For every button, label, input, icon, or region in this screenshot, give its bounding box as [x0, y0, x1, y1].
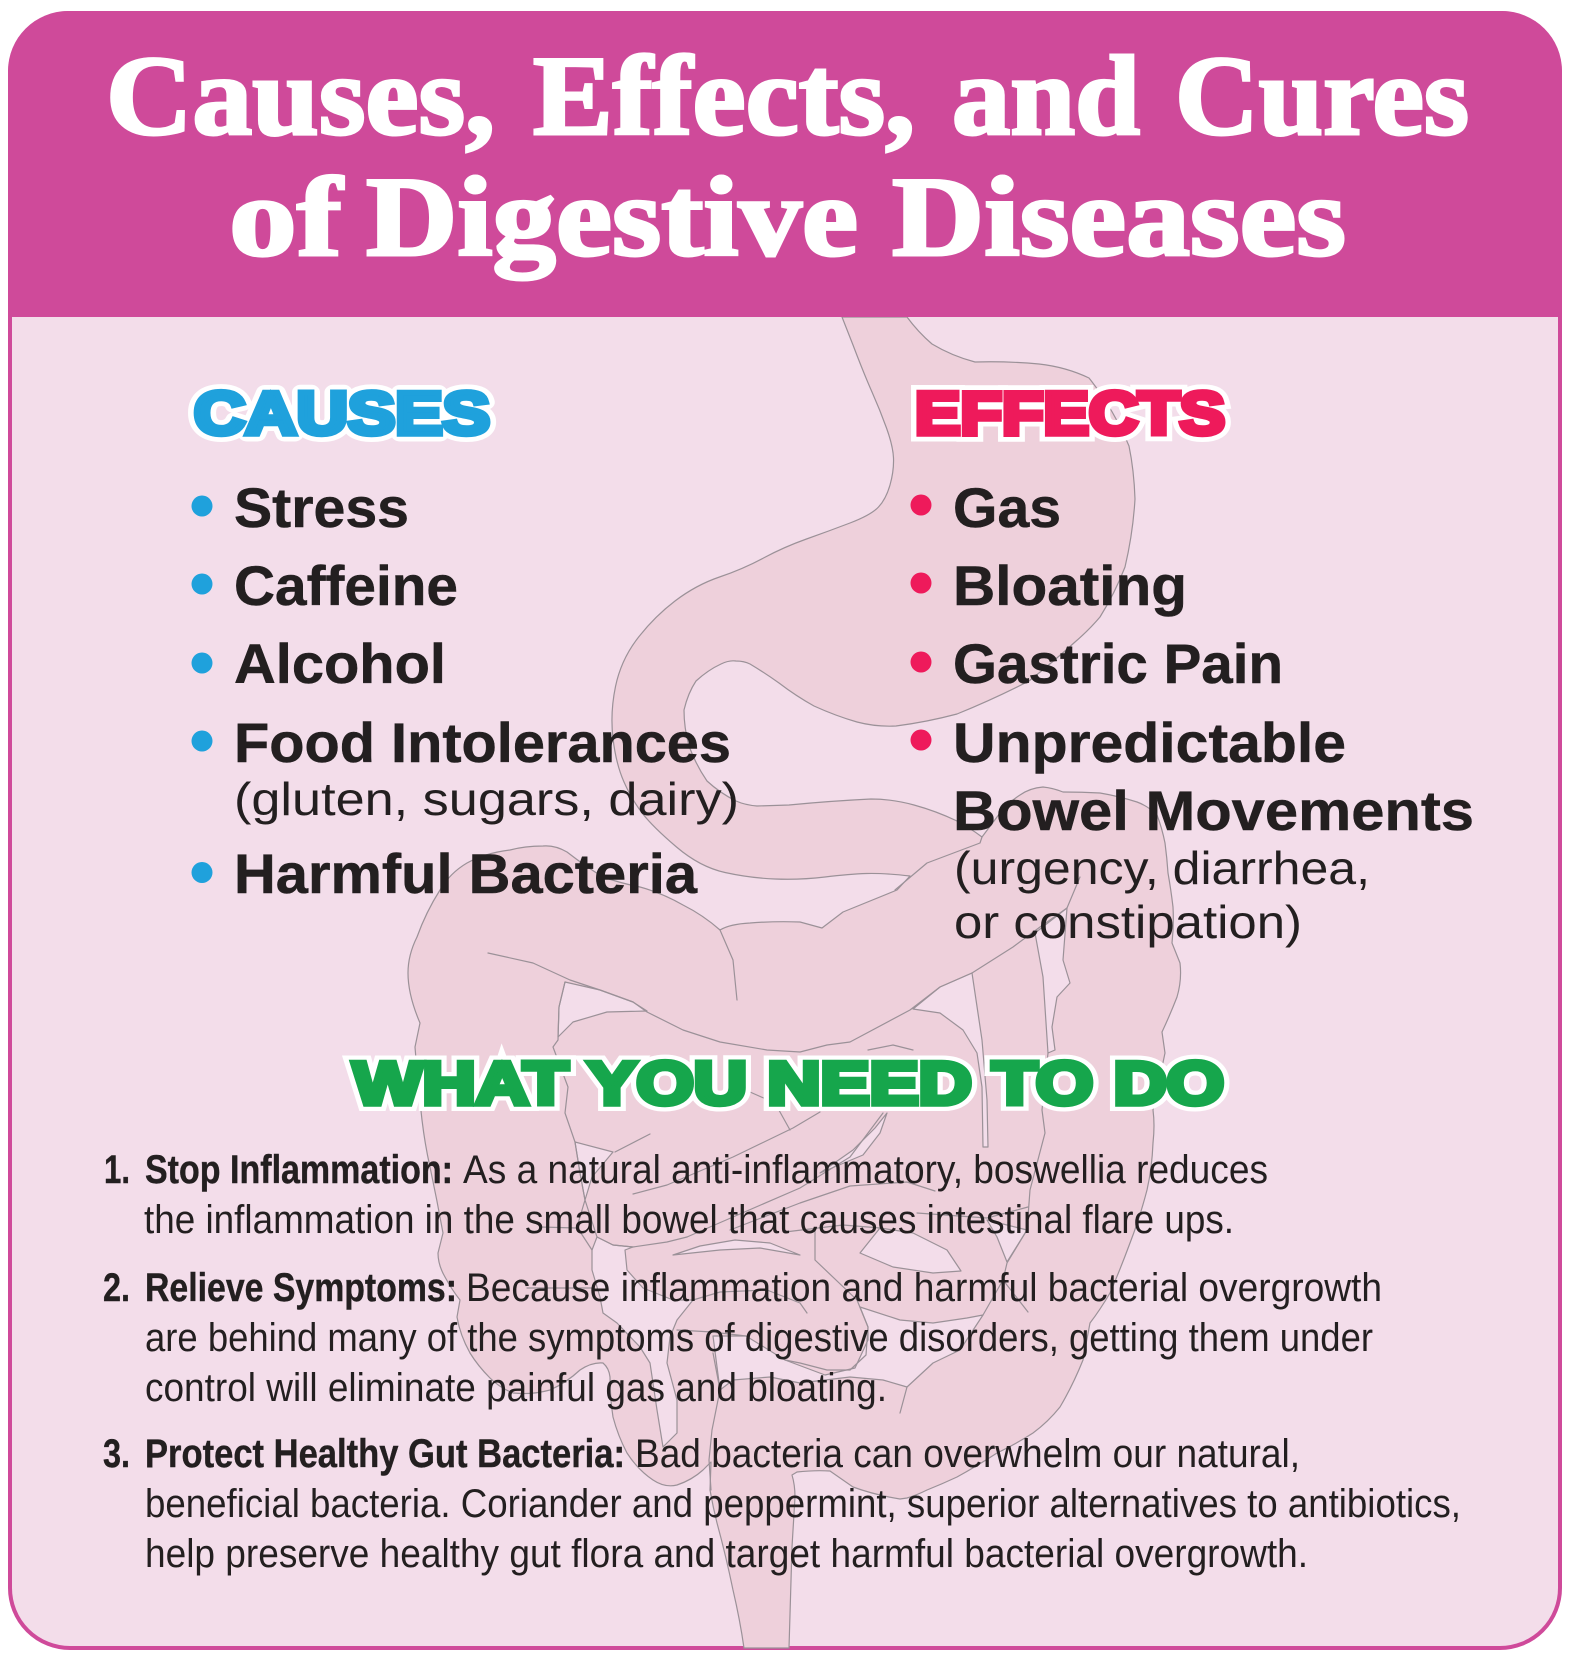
list: causes: Stress — [234, 476, 409, 539]
heading: effects: EFFECTS — [915, 380, 1225, 447]
title: Effects, — [533, 34, 915, 159]
gut silhouette — [408, 317, 1181, 1648]
text block: step 3: beneficial bacteria. Coriander and peppermint, superior alternatives to antibiotics, — [145, 1482, 1461, 1526]
title: of — [229, 155, 344, 280]
list: causes: (gluten, sugars, dairy) — [234, 773, 739, 825]
text block: step 1: As a natural anti-inflammatory, boswellia reduces — [463, 1148, 1268, 1192]
text block: step 1 — [104, 1148, 1268, 1242]
list: causes: Caffeine — [234, 554, 458, 617]
title: Cures — [1175, 34, 1469, 159]
title — [106, 34, 1469, 280]
text block: step 2: control will eliminate painful gas and bloating. — [145, 1366, 887, 1410]
text block: step 1: the inflammation in the small bowel that causes intestinal flare ups. — [144, 1198, 1234, 1242]
gut hole: central spike — [592, 1237, 693, 1447]
text block: step 2: are behind many of the symptoms of digestive disorders, getting them under — [145, 1316, 1373, 1360]
text block: step 2: Because inflammation and harmful bacterial overgrowth — [466, 1266, 1382, 1310]
list: effects: Bowel Movements — [953, 779, 1474, 842]
gut hole: right sliver — [987, 1220, 1027, 1262]
title: Causes, — [106, 34, 495, 159]
heading: causes: CAUSES — [194, 380, 490, 447]
gut hole: leaf — [860, 1228, 961, 1273]
list: effects: (urgency, diarrhea, — [954, 842, 1370, 894]
gut hole: thin strip — [673, 1240, 800, 1255]
gut hole: upper sliver — [820, 1113, 887, 1173]
gut hole: left of small bowel — [575, 1142, 613, 1200]
gut hole: colon channel — [1035, 908, 1070, 1053]
title: and — [952, 34, 1140, 159]
list: effects — [910, 476, 1474, 948]
gut hole: lower pale band — [713, 1307, 983, 1390]
bullet dots: causes — [192, 496, 212, 883]
heading: effects: EFFECTS — [915, 380, 1225, 447]
list: effects: Gas — [953, 476, 1061, 539]
list: effects: Bloating — [953, 554, 1187, 617]
list: causes — [192, 476, 739, 905]
text block: step 3: 3. — [103, 1432, 130, 1476]
bullet dots: effects — [910, 494, 932, 750]
text block: step 2 — [103, 1266, 1382, 1410]
title: Digestive — [366, 155, 858, 280]
list: effects: Unpredictable — [953, 711, 1346, 774]
text block: step 3: help preserve healthy gut flora and target harmful bacterial overgrowth. — [145, 1532, 1308, 1576]
title: Diseases — [892, 155, 1346, 280]
text block: step 2: Relieve Symptoms: — [145, 1266, 457, 1310]
heading: what you need to do: WHAT YOU NEED TO DO — [353, 1050, 1224, 1117]
text block: step 2: 2. — [103, 1266, 130, 1310]
list: effects: or constipation) — [954, 896, 1302, 948]
header band — [8, 11, 1562, 317]
gut interior fold lines — [488, 837, 1080, 1490]
list: causes: Food Intolerances — [234, 711, 731, 774]
list: causes: Alcohol — [234, 632, 446, 695]
heading: what you need to do: WHAT YOU NEED TO DO — [353, 1050, 1224, 1117]
text block: step 3: Bad bacteria can overwhelm our natural, — [635, 1432, 1300, 1476]
text block: step 1: 1. — [104, 1148, 130, 1192]
list: causes: Harmful Bacteria — [234, 842, 698, 905]
gut hole: upper left triangle — [558, 982, 647, 1037]
text block: step 3: Protect Healthy Gut Bacteria: — [145, 1432, 625, 1476]
illustration: digestive tract — [408, 317, 1181, 1648]
list: effects: Gastric Pain — [953, 632, 1283, 695]
gut hole: long vertical channel — [913, 973, 988, 1147]
text block: step 1: Stop Inflammation: — [145, 1148, 453, 1192]
text block: step 3 — [103, 1432, 1461, 1576]
heading: causes: CAUSES — [194, 380, 490, 447]
